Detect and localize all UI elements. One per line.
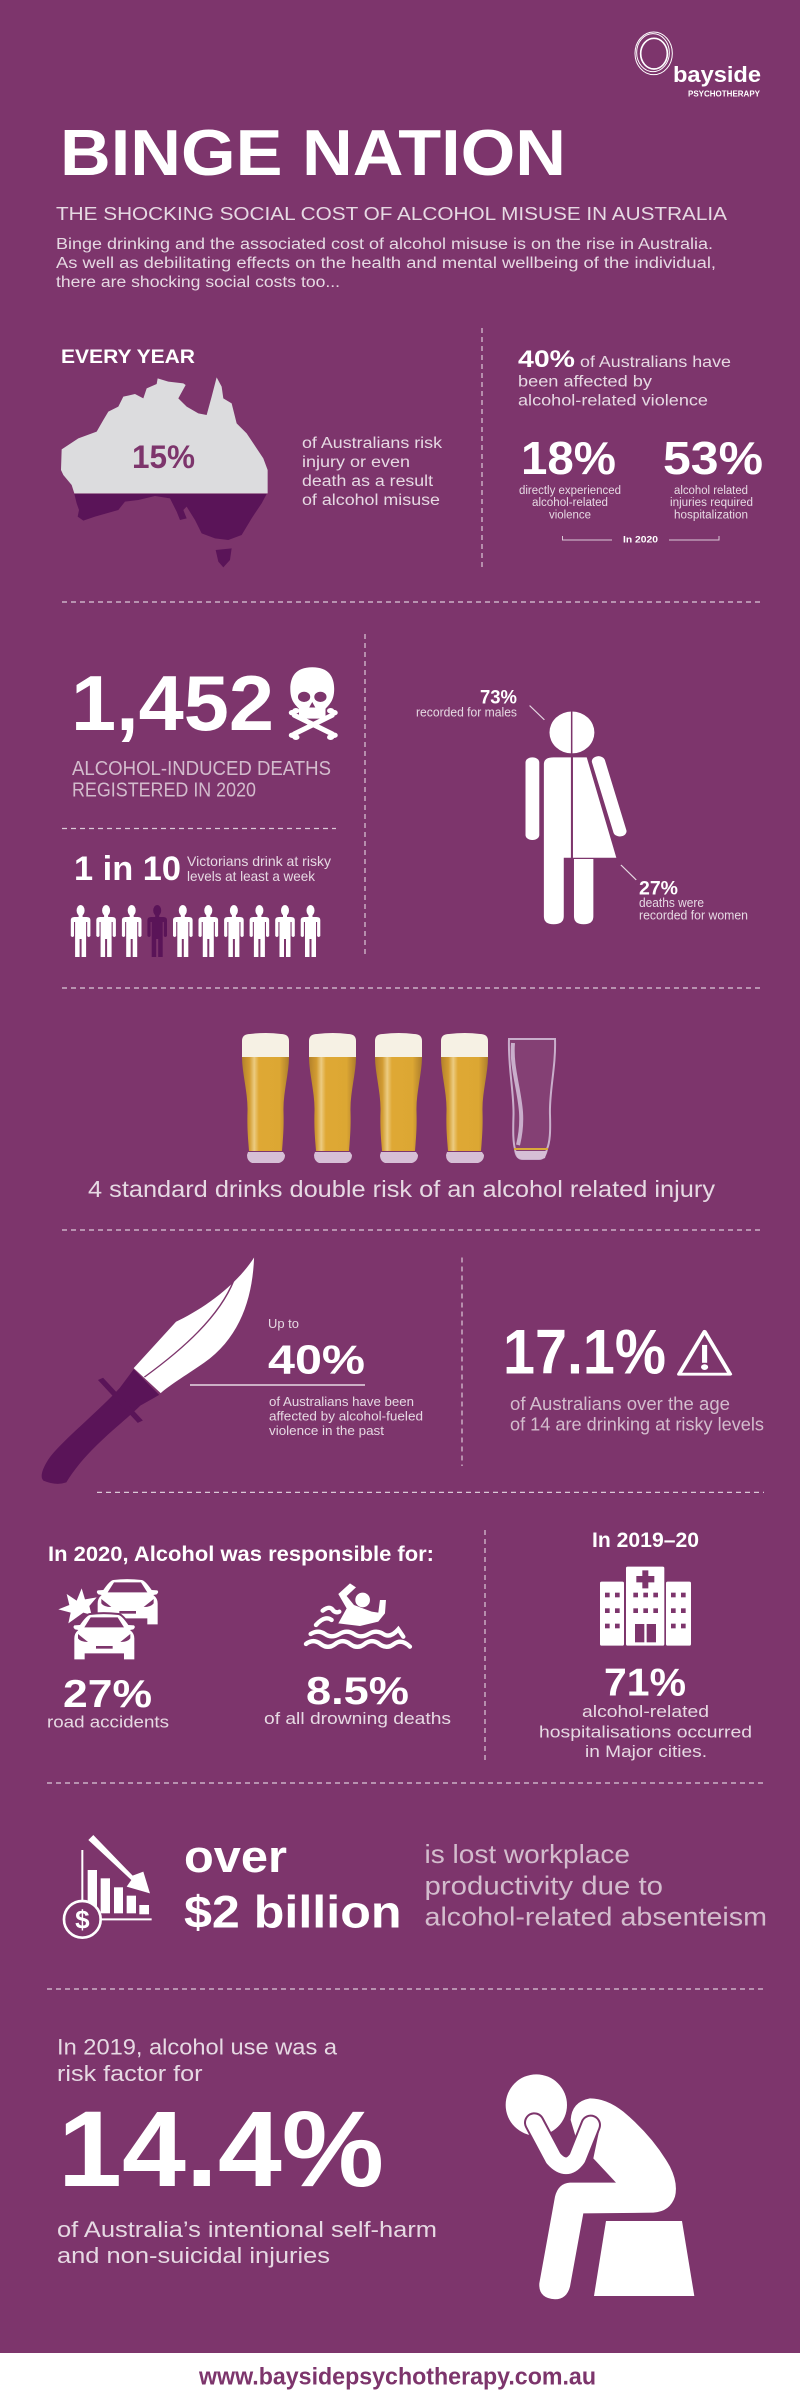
stat: 27% women: recorded for women [639, 908, 748, 922]
stat: up to 40%: violence in the past [269, 1423, 384, 1438]
panel: alcohol-related violence [518, 346, 763, 546]
caption: over the age of 14: of Australians over the age [510, 1394, 730, 1414]
caption: hospitalisations [539, 1702, 752, 1761]
intro paragraph [56, 236, 716, 291]
stat: 18%: violence [549, 510, 591, 522]
icon: drowning swimmer [306, 1583, 410, 1647]
stat: 53%: alcohol related [674, 485, 748, 497]
stat: 71%: 71% [604, 1662, 686, 1704]
panel: every year 15 percent [61, 347, 442, 567]
stat: 27% women: deaths were [639, 896, 704, 910]
icon: logo rings [635, 32, 672, 75]
panel: self-harm risk [57, 2034, 694, 2299]
stat: 40% affected [518, 346, 731, 410]
text: in 2019: In 2019, alcohol use was a [57, 2034, 338, 2060]
panel: knife 40% violence [42, 1257, 423, 1484]
heading: in 2019-20: In 2019–20 [592, 1529, 699, 1552]
panel: lost productivity [64, 1831, 767, 1938]
website url: www.baysidepsychotherapy.com.au [198, 2364, 596, 2391]
caption: risk of injury: injury or even [302, 454, 410, 471]
text: self-harm: of Australia’s intentional self-harm [57, 2217, 437, 2242]
stat: 73% males: recorded for males [416, 706, 517, 720]
icon: knife [42, 1257, 254, 1484]
stat: 1 in 10: 1 in 10 [74, 850, 181, 888]
panel: deaths by gender [416, 688, 748, 924]
caption: deaths registered [72, 758, 331, 802]
stat: 8.5% drowning [264, 1670, 451, 1728]
stat: 27% road accidents [47, 1673, 169, 1732]
stat: 17.1%: 17.1% [503, 1318, 666, 1388]
heading: every year: EVERY YEAR [61, 347, 195, 368]
stat: 18%: directly experienced [519, 485, 621, 497]
panel: 17.1% risky levels [503, 1318, 764, 1435]
heading: responsible for: In 2020, Alcohol was responsible for: [48, 1543, 434, 1566]
caption: workplace productivity [424, 1839, 767, 1932]
panel: 1 in 10 Victorians [71, 850, 331, 957]
logo: bayside psychotherapy: PSYCHOTHERAPY [688, 89, 760, 99]
intro paragraph: there are shocking social costs too... [56, 274, 340, 291]
bracket: in 2020: In 2020 [623, 535, 658, 546]
caption: hospitalisations: hospitalisations occurred [539, 1723, 752, 1742]
stat: 1,452: 1,452 [71, 659, 274, 747]
stat: 53% [663, 432, 763, 522]
stat: 8.5% drowning: 8.5% [306, 1670, 409, 1713]
footer band [0, 2353, 800, 2406]
stat: 8.5% drowning: of all drowning deaths [264, 1709, 451, 1728]
logo: bayside psychotherapy [635, 32, 761, 99]
stat: over $2 billion: $2 billion [184, 1887, 402, 1938]
panel: in 2019-20 hospitalisations [539, 1529, 752, 1761]
icon: empty beer glass [509, 1039, 555, 1159]
title: BINGE NATION [60, 116, 566, 189]
icon: car crash [58, 1579, 158, 1659]
icon: warning triangle [679, 1331, 730, 1374]
stat: up to 40%: 40% [268, 1336, 365, 1382]
icon: falling chart and dollar: $ [75, 1904, 90, 1934]
icon: falling chart and dollar [64, 1835, 152, 1938]
caption: 4 standard drinks: 4 standard drinks double risk of an alcohol related injury [88, 1176, 716, 1202]
panel: in 2020 alcohol was responsible for [47, 1543, 451, 1732]
stat: 27% women [639, 879, 748, 922]
stat: over $2 billion [184, 1831, 402, 1938]
text: self-harm [57, 2217, 437, 2268]
stat: over $2 billion: over [184, 1831, 287, 1882]
stat: up to 40%: Up to [268, 1316, 299, 1331]
stat: 53%: injuries required [670, 497, 753, 509]
caption: workplace productivity: is lost workplace [424, 1839, 630, 1869]
intro paragraph: Binge drinking and the associated cost of alcohol misuse is on the rise in Australia. [56, 236, 713, 253]
text: self-harm: and non-suicidal injuries [57, 2243, 330, 2268]
text: in 2019 [57, 2034, 338, 2086]
stat: up to 40%: of Australians have been [269, 1394, 414, 1409]
icon: distressed seated person [506, 2074, 694, 2299]
caption: risk of injury: of alcohol misuse [302, 492, 440, 509]
caption: over the age of 14 [510, 1394, 764, 1435]
stat: 27% women: 27% [639, 879, 678, 900]
stat: 73% males: 73% [480, 688, 517, 709]
stat: 14.4%: 14.4% [58, 2088, 384, 2209]
caption: Victorians [187, 853, 331, 884]
map of Australia [61, 377, 268, 567]
stat: 15%: 15% [132, 439, 195, 475]
caption: deaths registered: ALCOHOL-INDUCED DEATHS [72, 758, 331, 780]
stat: 27% road accidents: road accidents [47, 1713, 169, 1732]
stat: 40% affected: 40% [518, 346, 575, 373]
icon: skull and crossbones [289, 667, 338, 740]
icon: hospital [600, 1567, 691, 1646]
pictogram: ten people [71, 905, 320, 957]
stat: 53%: 53% [663, 432, 763, 484]
stat: up to 40%: affected by alcohol-fueled [269, 1409, 423, 1424]
intro paragraph: As well as debilitating effects on the health and mental wellbeing of the individual, [56, 255, 716, 272]
subtitle: THE SHOCKING SOCIAL COST OF ALCOHOL MISUSE IN AUSTRALIA [56, 203, 728, 224]
text: in 2019: risk factor for [57, 2061, 202, 2086]
panel: alcohol-induced deaths [71, 659, 338, 802]
stat: 18%: alcohol-related [532, 497, 608, 509]
caption: deaths registered: REGISTERED IN 2020 [72, 780, 256, 802]
stat: 53%: hospitalization [674, 510, 748, 522]
stat: 27% road accidents: 27% [63, 1673, 152, 1716]
caption: workplace productivity: productivity due to [424, 1870, 663, 1900]
caption: Victorians: levels at least a week [187, 868, 316, 884]
caption: risk of injury: of Australians risk [302, 435, 442, 452]
logo: bayside psychotherapy: bayside [673, 62, 761, 87]
bracket: in 2020 [562, 535, 719, 546]
caption: risk of injury [302, 435, 442, 509]
caption: risk of injury: death as a result [302, 473, 434, 490]
caption: hospitalisations: in Major cities. [585, 1742, 707, 1761]
stat: 40% affected: alcohol-related violence [518, 393, 708, 410]
stat: 40% affected: of Australians have [580, 354, 731, 371]
stat: 73% males [416, 688, 517, 720]
icon: four full beer glasses [242, 1033, 488, 1163]
caption: over the age of 14: of 14 are drinking at risky levels [510, 1415, 764, 1435]
stat: 40% affected: been affected by [518, 374, 652, 390]
stat: 18%: 18% [521, 432, 616, 484]
icon: half male half female figure [526, 706, 636, 924]
caption: Victorians: Victorians drink at risky [187, 853, 331, 869]
caption: hospitalisations: alcohol-related [582, 1702, 709, 1721]
panel: standard drinks [88, 1033, 716, 1202]
stat: 18% [519, 432, 621, 522]
caption: workplace productivity: alcohol-related absenteism [424, 1902, 767, 1932]
stat: up to 40% [190, 1316, 423, 1438]
